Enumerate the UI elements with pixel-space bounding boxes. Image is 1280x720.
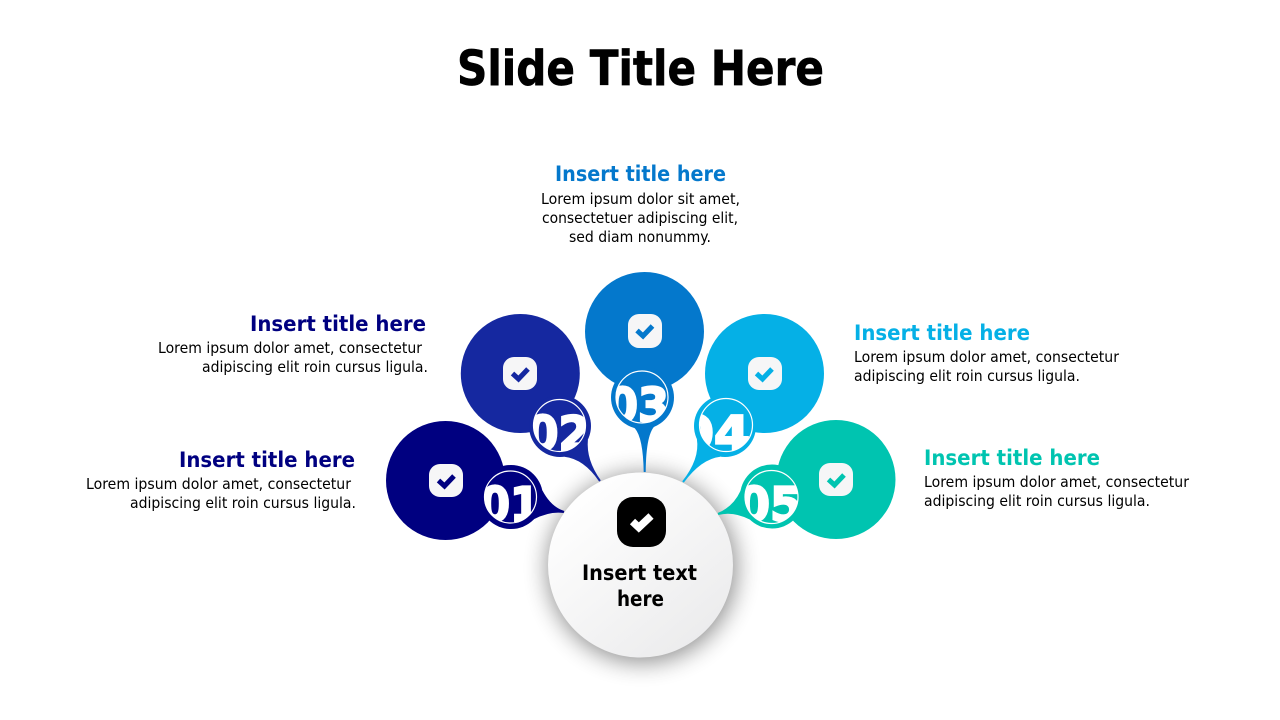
body 03: consectetuer adipiscing elit, <box>542 209 738 227</box>
item 01 bubble <box>386 421 564 540</box>
text block 01 <box>86 448 356 512</box>
heading 05: Insert title here <box>924 446 1100 470</box>
hub shadow <box>548 474 736 662</box>
heading 01: Insert title here <box>179 448 355 472</box>
number 05: 05 <box>738 478 802 533</box>
central hub <box>548 472 733 658</box>
circle 02 <box>461 314 580 433</box>
item 04 bubble <box>678 314 824 483</box>
text block 04 <box>854 321 1120 385</box>
body 05: adipiscing elit roin cursus ligula. <box>924 492 1150 510</box>
body 01: adipiscing elit roin cursus ligula. <box>130 494 356 512</box>
item 05 bubble <box>718 420 896 539</box>
body 05: Lorem ipsum dolor amet, consectetur <box>924 473 1190 491</box>
number 05 <box>744 470 799 524</box>
circle 01 <box>386 421 505 540</box>
icon: check 03 <box>628 314 662 348</box>
hub text: here <box>617 587 664 611</box>
body 02: adipiscing elit roin cursus ligula. <box>202 358 428 376</box>
body 03: Lorem ipsum dolor sit amet, <box>541 190 740 208</box>
number 02: 02 <box>527 407 590 462</box>
hub disc <box>548 472 733 658</box>
body 02 <box>158 339 428 376</box>
heading 02: Insert title here <box>250 312 426 336</box>
icon: check 05 <box>819 463 853 496</box>
pin 02 <box>529 395 601 482</box>
number 03: 03 <box>607 379 669 434</box>
item 02 bubble <box>461 314 601 482</box>
body 01 <box>86 475 356 512</box>
circle 03 <box>585 272 704 391</box>
number 01 <box>484 470 538 524</box>
body 04 <box>854 348 1120 385</box>
number 03 <box>615 370 669 424</box>
icon: check 01 <box>429 464 463 497</box>
text block 03 <box>541 162 740 246</box>
pin 04 <box>682 395 756 483</box>
pin 01 <box>479 465 564 529</box>
body 03: sed diam nonummy. <box>569 228 711 246</box>
title: Slide Title Here <box>457 41 824 97</box>
icon: check 04 <box>748 357 782 390</box>
number 04: 04 <box>678 407 750 462</box>
icon: check 02 <box>503 357 537 390</box>
heading 03: Insert title here <box>555 162 726 186</box>
text block 02 <box>158 312 428 376</box>
body 05 <box>924 473 1190 510</box>
body 04: Lorem ipsum dolor amet, consectetur <box>854 348 1120 366</box>
icon: hub check <box>617 497 666 547</box>
body 03 <box>541 190 740 246</box>
item 03 bubble <box>585 272 704 472</box>
body 02: Lorem ipsum dolor amet, consectetur <box>158 339 423 357</box>
body 01: Lorem ipsum dolor amet, consectetur <box>86 475 352 493</box>
hub text: Insert text <box>582 561 697 585</box>
number 02 <box>532 398 586 452</box>
pin 03 <box>611 366 674 472</box>
heading 04: Insert title here <box>854 321 1030 345</box>
number 01: 01 <box>480 478 540 533</box>
text block 05 <box>924 446 1190 510</box>
number 04 <box>698 398 754 452</box>
pin 05 <box>718 464 804 528</box>
body 04: adipiscing elit roin cursus ligula. <box>854 367 1080 385</box>
hub text <box>582 561 697 611</box>
circle 04 <box>705 314 824 433</box>
circle 05 <box>776 420 896 539</box>
